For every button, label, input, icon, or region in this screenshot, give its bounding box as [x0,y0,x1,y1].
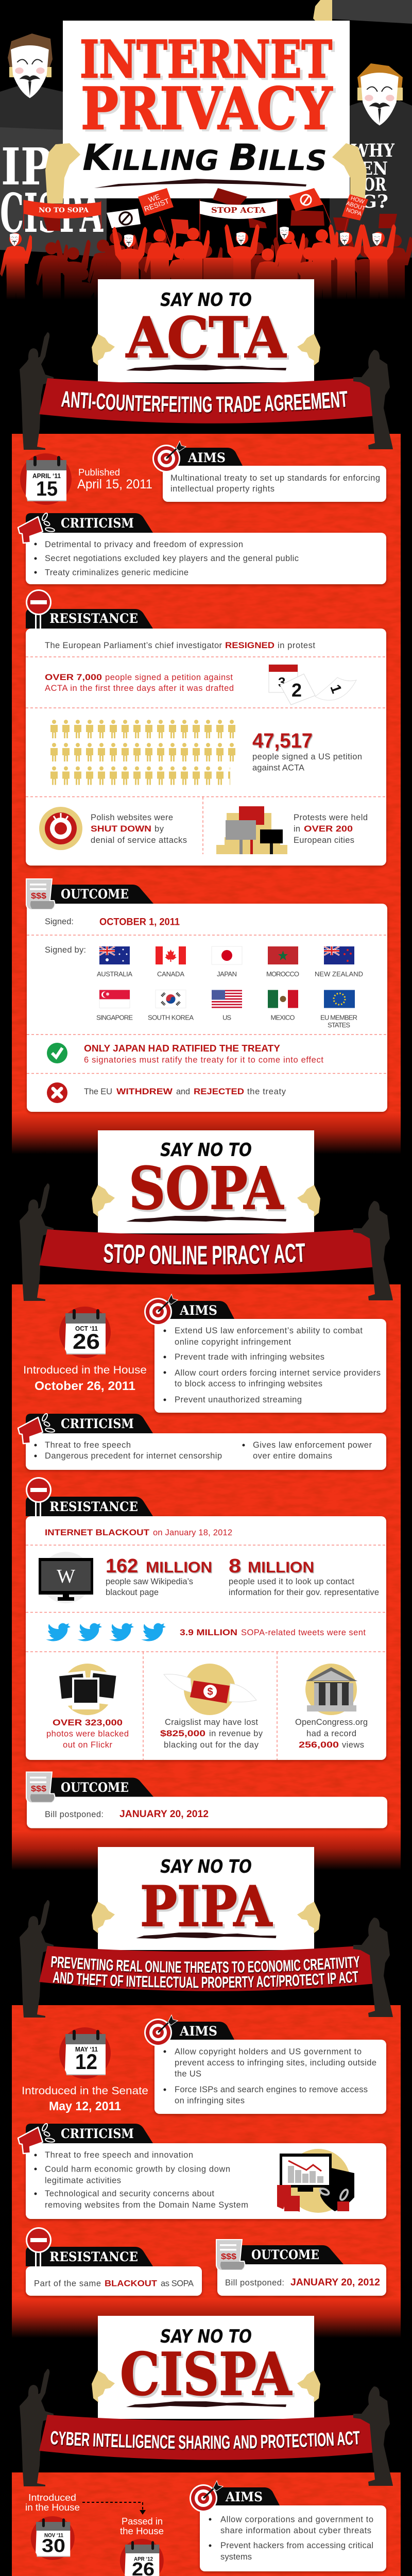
SOPA outcome: OUTCOME [61,1780,129,1795]
ACTA outcome: $$$ [31,892,46,901]
PIPA date: MAY ‘11 [75,2045,98,2053]
flags of signatories: MEXICO [271,1014,295,1021]
PIPA resistance: BLACKOUT [105,2278,158,2289]
SOPA resistance: information for their gov. representative [229,1588,379,1597]
ACTA resistance: 47,517 [252,730,313,752]
ACTA resistance: OVER 200 [304,824,353,834]
stat: Wikipedia views [106,1555,314,1577]
section header: Say no to PIPA [20,1847,393,2018]
hands holding title sign [45,0,367,204]
back row silhouettes [36,232,412,366]
icon: check [47,1043,67,1063]
banner title [51,1956,360,1990]
icon: blacked out photos [57,1664,118,1715]
flags of signatories: AUSTRALIA [97,970,132,978]
section header: Say no to CISPA [20,2316,393,2486]
flags of signatories: EU MEMBER [320,1014,357,1021]
ACTA resistance: people signed a US petition [252,752,362,761]
PIPA date: Introduced in the Senate [22,2085,148,2097]
ACTA resistance: OVER 7,000 [45,672,102,682]
SOPA aims: Prevent unauthorized streaming [175,1395,302,1404]
icon: countdown calendar: 2 [291,680,302,701]
flag: Morocco [268,946,298,964]
bill name: PIPA [142,1876,275,1941]
CISPA aims: share information about cyber threats [220,2526,371,2535]
front row silhouettes [0,224,396,346]
SOPA resistance: in revenue by [209,1729,263,1738]
PIPA date: 12 [75,2049,97,2074]
ACTA outcome: ONLY JAPAN HAD RATIFIED THE TREATY [84,1043,280,1054]
icon: capitol building [305,1664,357,1715]
SOPA resistance: 256,000 [299,1740,339,1750]
SOPA outcome: Bill postponed: [45,1810,104,1819]
calendar: Apr 26 [120,2539,164,2576]
small masks [10,227,382,247]
flag: Australia [99,946,130,964]
SOPA resistance: $825,000 [160,1728,205,1738]
CISPA timeline: the House [120,2526,164,2536]
SOPA criticism [18,1413,386,1470]
ACTA resistance: in protest [278,641,315,650]
PIPA criticism: CRITICISM [61,2126,134,2141]
ACTA resistance: people signed a petition against [105,673,233,682]
icon: flying money: $ [207,1686,213,1698]
SOPA aims: AIMS [179,1303,217,1318]
SOPA outcome [26,1772,387,1828]
title: Killing Bills: KILLING BILLS [82,137,327,179]
stat: Wikipedia views: MILLION [146,1559,212,1576]
bill name: ACTA [128,308,289,372]
SOPA resistance: Craigslist may have lost [165,1718,258,1727]
SOPA aims: Extend US law enforcement’s ability to combat [175,1326,363,1335]
banner title: CYBER INTELLIGENCE SHARING AND PROTECTION ACT [50,2431,360,2450]
banner title: AND THEFT OF INTELLECTUAL PROPERTY ACT/PROTECT IP ACT [53,1971,359,1990]
SOPA resistance: out on Flickr [63,1740,112,1750]
title: Internet: INTERNET [82,32,335,92]
CISPA timeline: Introduced [28,2493,76,2503]
panel: SOPA background [12,1284,401,1870]
flag: Canada [156,946,186,964]
ACTA criticism: Detrimental to privacy and freedom of expression [45,540,243,549]
flags of signatories: US [222,1014,231,1021]
icon: countdown calendar: 3 [278,674,285,690]
signs and banners: NOPA [346,207,363,217]
SOPA criticism: Gives law enforcement power [253,1440,372,1450]
SOPA resistance: views [342,1740,364,1750]
ACTA criticism: CRITICISM [61,516,134,531]
icon: economy in chains [277,2149,354,2213]
calendar: Nov 30 [31,2516,75,2560]
CISPA timeline [23,2493,191,2576]
section header: Say no to SOPA: SAY NO TO [160,1140,252,1161]
ACTA outcome: OUTCOME [61,887,129,902]
icon: countdown calendar: 1 [327,682,345,696]
section header: Say no to SOPA [20,1130,393,1301]
ACTA resistance: Protests were held [294,813,368,822]
CISPA timeline: 30 [42,2535,65,2556]
PIPA criticism: removing websites from the Domain Name System [45,2200,248,2210]
ACTA resistance: European cities [294,836,354,845]
banner title: STOP ONLINE PIRACY ACT [104,1243,306,1266]
icon: cross [47,1082,67,1103]
SOPA outcome: $$$ [31,1785,46,1793]
SOPA criticism: Threat to free speech [45,1440,131,1450]
right masked figure [357,63,403,126]
left masked figure [8,33,53,98]
shirt lettering right: OR [363,174,387,195]
PIPA date: May 12, 2011 [49,2099,121,2113]
flags of signatories: STATES [328,1021,350,1029]
ACTA date: April 15, 2011 [77,477,152,492]
PIPA criticism [18,2123,386,2219]
SOPA resistance: on January 18, 2012 [153,1528,232,1537]
ACTA outcome: REJECTED [194,1087,244,1096]
flag: Japan [212,946,242,964]
PIPA date [22,2027,148,2113]
bill name: CISPA [122,2342,294,2411]
signs and banners [24,188,397,250]
header background: protesters in masks [0,0,412,258]
flags of signatories: CANADA [157,970,184,978]
arrow: introduced to passed [82,2502,146,2515]
PIPA criticism: Technological and security concerns about [45,2189,214,2198]
shirt lettering right [351,140,395,212]
flags of signatories: SOUTH KOREA [148,1014,194,1021]
ACTA resistance: by [154,824,164,834]
panel: PIPA background [12,2005,401,2338]
section header: Say no to CISPA: SAY NO TO [160,2326,252,2347]
PIPA outcome: JANUARY 20, 2012 [290,2277,380,2288]
shirt lettering left: CISPA [0,181,104,245]
icon: countdown calendar [269,665,356,705]
stat: Wikipedia views: 8 [229,1555,241,1577]
flags of signatories: MOROCCO [266,970,299,978]
pictogram: petition signers [50,720,236,786]
say no to: SAY NO TO [160,290,252,311]
SOPA criticism: CRITICISM [61,1416,134,1431]
flags of signatories: SINGAPORE [96,1014,133,1021]
SOPA aims: Allow court orders forcing internet service providers [175,1368,381,1378]
signs and banners: STOP ACTA [211,206,266,215]
ACTA resistance: against ACTA [252,764,304,773]
SOPA date [23,1307,147,1393]
flags of signatories: NEW ZEALAND [315,970,363,978]
signs and banners: ABOUT [346,200,366,212]
flag: New Zealand [324,946,354,964]
bill name: SOPA [131,1157,286,1225]
CISPA aims: Allow corporations and government to [220,2515,373,2524]
banner title: ANTI-COUNTERFEITING TRADE AGREEMENT [61,391,348,414]
title: Privacy: PRIVACY [81,76,333,143]
SOPA criticism: over entire domains [253,1451,332,1461]
SOPA resistance: had a record [306,1729,356,1738]
PIPA outcome: $$$ [221,2252,236,2261]
ACTA aims: intellectual property rights [170,484,274,494]
ACTA resistance: The European Parliament’s chief investigator [45,641,222,650]
shirt lettering left: IP A [1,138,100,197]
PIPA aims: Force ISPs and search engines to remove access [175,2085,368,2094]
CISPA aims: AIMS [225,2489,263,2504]
SOPA resistance [26,1477,386,1760]
ACTA resistance: ACTA in the first three days after it was drafted [45,684,234,693]
SOPA date: October 26, 2011 [35,1379,135,1393]
flag: United States [212,990,242,1008]
icon: Wikipedia monitor: W [57,1566,75,1587]
PIPA resistance: RESISTANCE [49,2249,138,2264]
title: Privacy: PRIVACY [83,78,336,145]
SOPA resistance: blackout page [106,1588,159,1597]
ACTA date [20,453,152,505]
section header: Say no to ACTA [20,279,393,450]
SOPA resistance: INTERNET BLACKOUT [45,1528,150,1537]
CISPA timeline: in the House [25,2502,80,2513]
shirt lettering right: EN [360,158,388,179]
protesting crowd [0,188,412,377]
ACTA outcome: OCTOBER 1, 2011 [99,917,180,927]
bill name: CISPA [120,2340,292,2409]
ACTA outcome: The EU [84,1087,112,1096]
SOPA aims: Prevent trade with infringing websites [175,1352,324,1362]
PIPA aims: on infringing sites [175,2096,245,2105]
SOPA date: OCT ‘11 [75,1325,98,1332]
icon: protest signs [216,806,287,854]
brush stroke [94,179,306,188]
ACTA resistance: denial of service attacks [91,836,187,845]
PIPA resistance [26,2227,202,2296]
ACTA resistance: Polish websites were [91,813,173,822]
CISPA aims: systems [220,2552,252,2562]
PIPA outcome [216,2240,386,2296]
bill name: PIPA [140,1874,273,1939]
section header: Say no to PIPA: SAY NO TO [160,1856,252,1877]
ACTA resistance: RESIGNED [225,640,274,650]
ACTA outcome [26,879,387,1112]
SOPA date: 26 [73,1329,100,1353]
ACTA resistance: in [294,824,300,834]
icons: twitter birds [46,1623,166,1641]
flag: Mexico [268,990,298,1008]
SOPA resistance: people used it to look up contact [229,1577,354,1586]
SOPA criticism: Dangerous precedent for internet censorship [45,1451,222,1461]
PIPA resistance: Part of the same [34,2279,101,2289]
bill name: ACTA [126,306,287,370]
PIPA aims [144,2015,386,2114]
flag: South Korea [156,990,186,1008]
PIPA criticism: Threat to free speech and innovation [45,2150,193,2160]
SOPA date: Introduced in the House [23,1364,147,1376]
shirt lettering left [0,138,104,245]
PIPA aims: prevent access to infringing sites, including outside [175,2058,376,2067]
ACTA aims: Multinational treaty to set up standards for enforcing [170,473,380,483]
stat: Wikipedia views: MILLION [248,1559,314,1576]
CISPA timeline: Passed in [122,2516,163,2527]
shirt lettering right: G? [360,191,388,212]
signs and banners: RESIST [143,196,170,213]
bill name: SOPA [129,1155,284,1223]
ACTA aims: AIMS [187,450,226,465]
SOPA resistance: people saw Wikipedia’s [106,1577,193,1586]
flags of signatories [96,946,363,1029]
ACTA outcome: and [176,1087,190,1096]
ACTA resistance [26,589,386,866]
SOPA aims [144,1294,386,1413]
shirt lettering right: WHY [351,140,395,161]
PIPA aims: AIMS [179,2024,217,2039]
SOPA aims: online copyright infringement [175,1337,291,1347]
ACTA aims [152,441,386,502]
ACTA criticism [18,512,386,584]
main title sign [63,21,350,198]
PIPA criticism: legitimate activities [45,2176,121,2185]
SOPA resistance: SOPA-related tweets were sent [241,1628,366,1637]
CISPA aims [190,2481,386,2571]
ACTA outcome: the treaty [247,1087,286,1096]
icon: flying money [164,1664,256,1715]
signs and banners: WE [147,192,161,204]
PIPA outcome: OUTCOME [251,2247,319,2262]
ACTA date: Published [78,467,120,478]
SOPA resistance: blacking out for the day [164,1740,259,1750]
PIPA criticism: Could harm economic growth by closing down [45,2165,230,2174]
CISPA timeline: APR ‘12 [134,2556,153,2563]
signs and banners: HOW [350,195,365,205]
ACTA criticism: Secret negotiations excluded key players and the general public [45,554,299,563]
PIPA aims: Allow copyright holders and US government to [175,2047,362,2057]
SOPA resistance: OpenCongress.org [295,1718,368,1727]
ACTA outcome: Signed by: [45,945,86,955]
SOPA resistance: RESISTANCE [49,1499,138,1514]
CISPA aims: Prevent hackers from accessing critical [220,2541,373,2550]
PIPA outcome: Bill postponed: [225,2278,284,2287]
ACTA date: 15 [36,478,58,500]
icon: denial of service target [39,807,82,850]
CISPA timeline: NOV ‘11 [44,2533,63,2539]
ACTA outcome: 6 signatories must ratify the treaty for it to come into effect [84,1055,323,1064]
ACTA resistance: SHUT DOWN [91,824,151,834]
flag: Singapore [99,990,130,1008]
SOPA resistance: 3.9 MILLION [180,1628,237,1637]
ACTA resistance: RESISTANCE [49,611,138,626]
ACTA outcome: Signed: [45,917,74,926]
flag: European Union [324,990,355,1008]
stat: Wikipedia views: 162 [106,1555,138,1577]
PIPA aims: the US [175,2069,201,2078]
SOPA resistance: photos were blacked [46,1729,129,1738]
SOPA outcome: JANUARY 20, 2012 [119,1809,209,1820]
panel: ACTA background [12,434,401,1154]
ACTA outcome: WITHDREW [116,1087,173,1096]
SOPA resistance: OVER 323,000 [53,1718,123,1727]
signs and banners: NO TO SOPA [39,207,89,214]
title: Internet: INTERNET [80,30,332,90]
flags of signatories: JAPAN [217,970,237,978]
PIPA resistance: as SOPA [161,2279,194,2289]
ACTA date: APRIL ‘11 [32,472,61,480]
ACTA criticism: Treaty criminalizes generic medicine [45,568,188,577]
icon: Wikipedia monitor [39,1552,93,1603]
panel: CISPA background [12,2472,401,2576]
banner title: PREVENTING REAL ONLINE THREATS TO ECONOMIC CREATIVITY [51,1956,360,1974]
SOPA aims: to block access to infringing websites [175,1379,322,1388]
